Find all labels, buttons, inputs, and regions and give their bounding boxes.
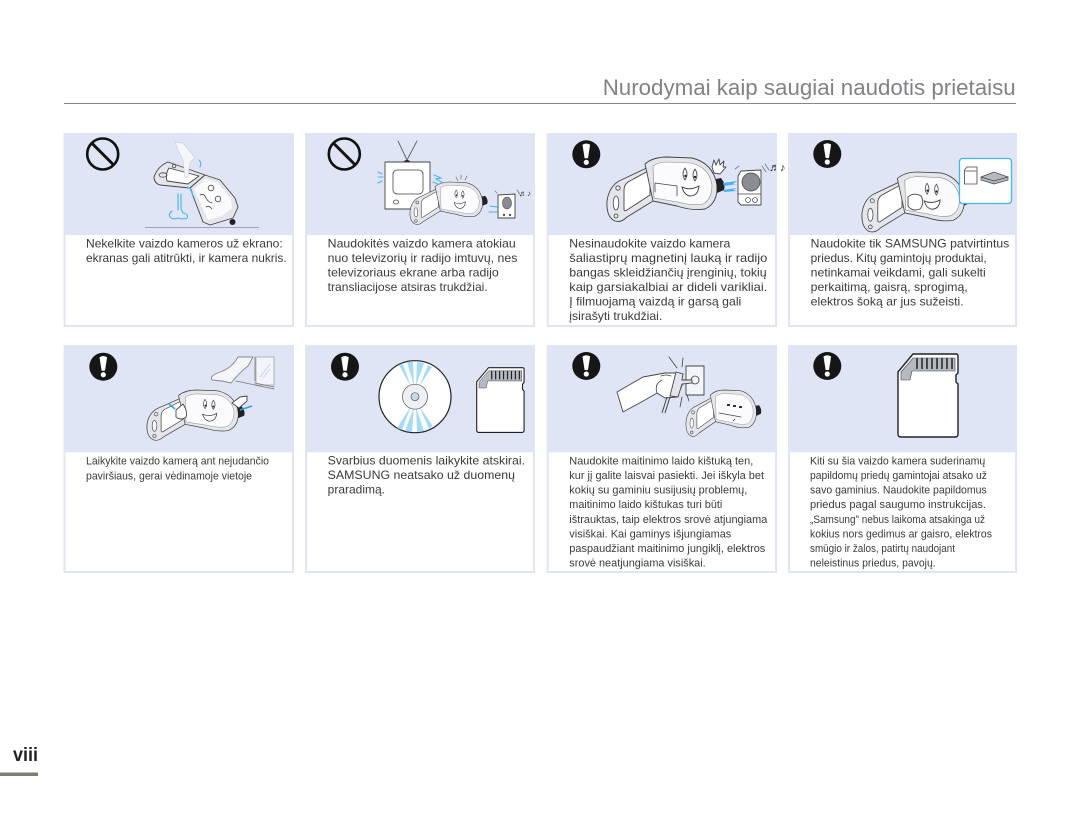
page number bar [0,772,38,776]
icon: prohibited [87,138,118,170]
text block [86,236,287,265]
text block: televizoriaus ekrane arba radijo [328,265,499,279]
text block [810,455,992,570]
panel: third-party accessories [788,345,1017,573]
text block: priedus. Kitų gamintojų produktai, [811,251,987,265]
icon: warning [572,140,600,168]
text block: Į filmuojamą vaizdą ir garsą gali [569,294,741,308]
illustration: large SD card [898,354,958,437]
panel: power plug [547,345,777,573]
illustration: camera [686,390,761,436]
text block: Laikykite vaizdo kamerą ant nejudančio [86,455,269,467]
text block [328,236,518,294]
illustration: speaker with notes: ♬♪ [769,162,786,174]
panel: do not lift by screen [64,133,294,327]
text block [569,455,768,570]
icon: prohibited [329,138,360,170]
text block: šaliastiprų magnetinį lauką ir radijo [569,251,768,265]
illustration: television [378,141,430,209]
text block: ištrauktas, taip elektros srovė atjungiama [569,514,768,526]
icon: warning [813,352,841,380]
illustration: small speaker [495,189,531,218]
text block: neleistinus priedus, pavojų. [810,558,936,570]
text block: paviršiaus, gerai vėdinamoje vietoje [86,470,252,482]
header rule [64,103,1016,104]
text block: Nesinaudokite vaizdo kamera [569,236,731,250]
illustration: camera on surface [147,390,252,440]
icon: warning [572,352,600,380]
text block: kaip garsiakalbiai ar dideli varikliai. [569,280,767,294]
icon: warning [331,353,359,381]
illustration: hand unplugging [617,357,704,413]
illustration: camera [862,172,971,232]
text block: bangas skleidžiančių įrenginių, tokių [569,266,767,280]
illustration: camera beside speaker [607,157,737,222]
text block: maitinimo laido kištukas turi būti [569,499,722,511]
text block [569,236,768,323]
text block: Svarbius duomenis laikykite atskirai. [328,453,525,467]
text block: „Samsung" nebus laikoma atsakinga už [810,514,985,526]
illustration: small speaker: ♬♪ [519,189,531,198]
text block: elektros šoką ar jus sužeisti. [811,294,964,308]
illustration: camera lifted by LCD [145,142,259,228]
illustration: SD card [477,368,524,432]
text block: smūgio ir žalos, patirtų naudojant [810,543,955,555]
text block: savo gaminius. Naudokite papildomus [810,484,987,496]
text block: kokių su gaminiu susijusių problemų, [569,484,747,496]
panel: avoid magnetic fields [547,133,786,327]
text block: ekranas gali atitrūkti, ir kamera nukris. [86,251,287,265]
text block: paspaudžiant maitinimo jungiklį, elektros [569,543,766,555]
callout: accessories box [960,158,1012,204]
illustration: speaker with notes [735,162,786,205]
header title: Nurodymai kaip saugiai naudotis prietaisu [603,75,1016,100]
text block: kur jį galite laisvai pasiekti. Jei iškyla bet [569,470,764,482]
text block: visiškai. Kai gaminys išjungiamas [569,528,732,540]
text block: Nekelkite vaizdo kameros už ekrano: [86,236,283,250]
text block: praradimą. [328,483,385,497]
text block: Kiti su šia vaizdo kamera suderinamų [810,455,985,467]
text block: priedus pagal saugumo instrukcijas. [810,499,986,511]
illustration: disc [379,361,451,433]
illustration: window and curtain [211,357,274,389]
text block: SAMSUNG neatsako už duomenų [328,468,515,482]
text block: papildomų priedų gamintojai atsako už [810,470,987,482]
illustration: camera between TV and speaker [410,175,497,225]
text block: Naudokite tik SAMSUNG patvirtintus [811,236,1009,250]
icon: warning [89,353,117,381]
panel: keep away from TV and radio [305,133,535,327]
page number: viii [13,745,38,766]
text block: kokius nors gedimus ar gaisro, elektros [810,528,992,540]
text block [86,455,269,482]
text block: nuo televizorių ir radijo imtuvų, nes [328,251,518,265]
text block: transliacijose atsiras trukdžiai. [328,280,488,294]
text block: Naudokitės vaizdo kamera atokiau [328,236,516,250]
text block: įsirašyti trukdžiai. [569,309,662,323]
icon: warning [813,140,841,168]
text block: perkaitimą, gaisrą, sprogimą, [811,280,968,294]
text block: Naudokite maitinimo laido kištuką ten, [569,455,753,467]
text block [328,453,525,497]
text block [811,236,1009,308]
panel: approved accessories [788,133,1017,327]
panel: stable ventilated surface [64,345,294,573]
text block: netinkamai veikdami, gali sukelti [811,266,986,280]
text block: srovė neatjungiama visiškai. [569,558,706,570]
panel: keep data separately [305,345,535,573]
